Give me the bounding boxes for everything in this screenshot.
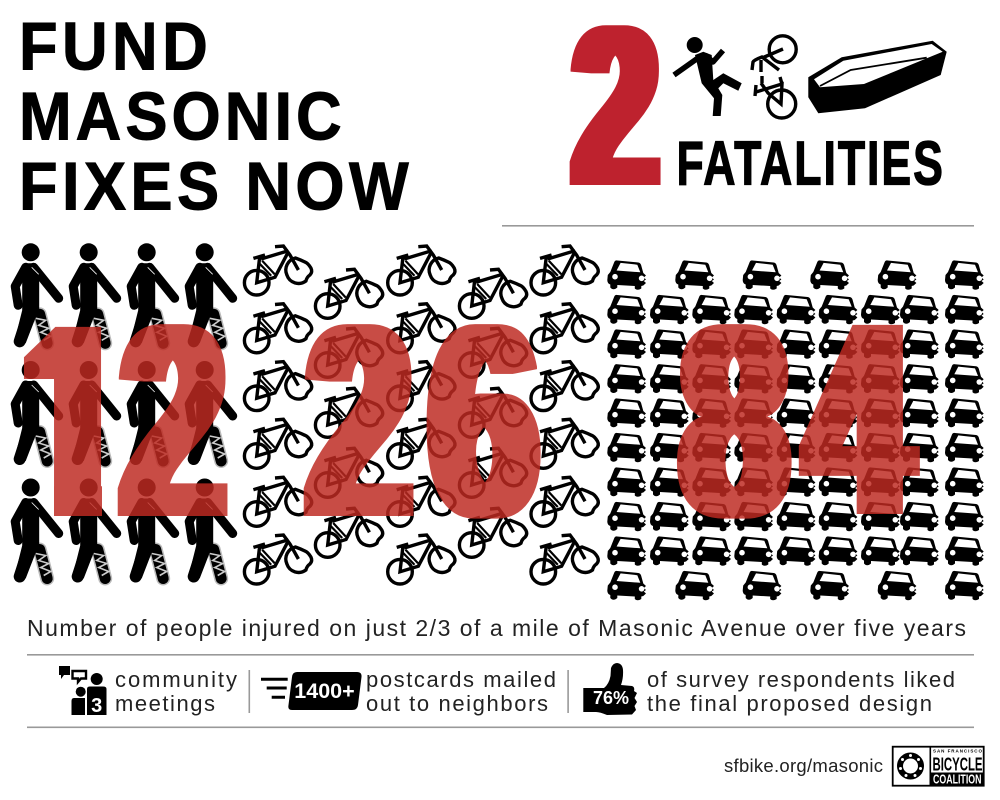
logo: san francisco bicycle coalition: SAN FRANCISCO	[933, 748, 982, 754]
panel: fatalities	[573, 0, 947, 232]
big injury numbers: 2	[308, 269, 410, 574]
title: FIXES NOW	[19, 148, 409, 224]
big injury numbers	[24, 324, 920, 519]
icon: coffin	[808, 41, 947, 113]
icon: mail lines and badge: 1400+	[294, 679, 355, 703]
big injury numbers: 4	[807, 267, 910, 571]
icon: people talking: 3	[91, 695, 102, 717]
text: the final proposed design	[647, 691, 932, 716]
icon: thumbs up: 76%	[593, 688, 629, 708]
caption: Number of people injured on just 2/3 of a mile of Masonic Avenue over five years	[27, 615, 966, 641]
text: community	[115, 667, 237, 692]
big injury numbers: 1	[22, 269, 124, 574]
text: meetings	[115, 691, 215, 716]
car icons	[607, 260, 984, 600]
big injury numbers: 2	[122, 269, 224, 574]
text: postcards mailed	[366, 667, 556, 692]
icon: thumbs up	[583, 663, 637, 715]
pedestrian icons	[15, 243, 233, 579]
big injury numbers: 8	[682, 268, 786, 573]
title: FUND	[19, 8, 208, 84]
fatalities label: FATALITIES	[676, 129, 943, 198]
bicycle icons	[244, 246, 598, 584]
icon: chainring	[899, 754, 922, 777]
text	[115, 667, 237, 716]
title: MASONIC	[19, 78, 342, 154]
icon: people talking	[59, 666, 106, 717]
logo: san francisco bicycle coalition	[893, 747, 984, 786]
icon: person falling	[674, 37, 742, 116]
title	[19, 8, 409, 224]
text: out to neighbors	[366, 691, 548, 716]
text	[647, 667, 955, 716]
stat: postcards	[261, 667, 556, 716]
text: of survey respondents liked	[647, 667, 955, 692]
big injury numbers: 6	[431, 268, 536, 573]
stat: survey	[583, 663, 955, 716]
stat: community meetings	[59, 666, 237, 717]
icon: mail lines and badge	[261, 672, 362, 710]
icon: fallen bicycle	[752, 36, 796, 118]
url: sfbike.org/masonic	[724, 755, 883, 776]
text	[366, 667, 556, 716]
